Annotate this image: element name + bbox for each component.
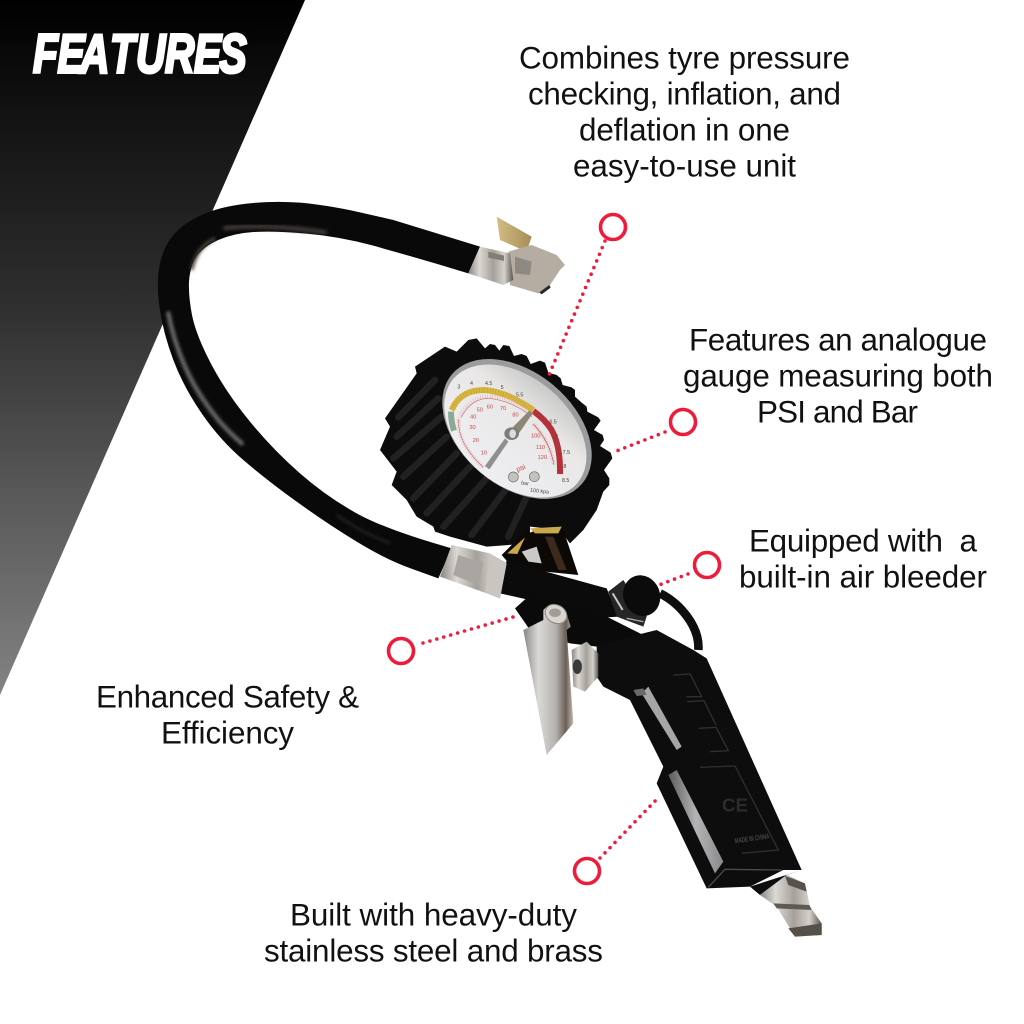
callout text: gauge measuring both [683,359,993,394]
engraved model text: MADE IN CHINA [734,831,770,845]
callout text: deflation in one [579,113,790,148]
tube [500,560,618,617]
gauge unit labels: 100 kpa [530,488,549,496]
callout text: Enhanced Safety & [96,680,359,715]
title: FEATURES [33,23,247,85]
gauge numerals: 3 [457,384,460,390]
trigger pivot housing [515,595,647,647]
callout: analogue gauge [614,323,993,452]
gauge numerals: 8.5 [562,478,569,484]
gauge unit labels: psi [515,462,527,474]
gauge numerals: 6.5 [549,419,557,425]
main tube and handle [440,527,822,937]
callout text: PSI and Bar [757,395,918,430]
gauge needle [485,411,533,469]
marker and leader [388,617,513,664]
gauge numerals: 60 [487,405,493,411]
marker and leader [659,552,720,585]
callout text [264,898,603,969]
callout text [519,41,850,184]
gauge numerals: 110 [536,445,545,451]
chrome pivot nut [572,642,598,692]
gauge numerals: 50 [477,407,483,413]
hose end chuck with brass lever [468,217,565,294]
gauge numerals: 70 [500,406,506,412]
callout text: checking, inflation, and [528,77,841,112]
CE mark: CE [722,795,748,816]
marker and leader [614,410,696,452]
gauge numerals: 120 [538,455,547,461]
bottom edge highlight [708,869,782,887]
rubber gauge boot [380,338,612,547]
gauge stem and brass fitting [502,527,578,575]
gauge assembly [380,331,619,547]
callout text: Efficiency [161,716,294,751]
gauge numerals: 30 [469,425,476,431]
air guard loop [660,593,698,650]
callout text: Built with heavy-duty [290,898,577,933]
callout text: Equipped with a [749,524,978,559]
callout text [683,323,993,430]
gauge numerals [457,381,570,484]
gauge numerals: 100 [531,433,540,439]
grip body [597,630,802,888]
gauge numerals: 4.5 [485,381,492,387]
gauge numerals: 20 [473,438,479,444]
callout text [739,524,987,595]
grip engraving [673,674,778,853]
callout: combined functions [519,41,850,375]
gauge numerals: 10 [481,450,487,456]
bleeder hex nut [608,580,647,627]
gauge numerals: 8 [563,464,566,470]
air bleeder knob [617,570,666,621]
gauge dial [415,331,619,527]
dial face [419,338,612,524]
callout text: Combines tyre pressure [519,41,850,76]
gauge numerals: 7 [555,434,558,440]
gauge numerals: 5 [501,385,504,391]
metal bezel [415,331,619,527]
gauge numerals: 80 [512,413,519,419]
callout text: stainless steel and brass [264,934,603,969]
gauge unit labels: bar [521,480,529,487]
boot ribs [393,380,527,537]
air hose [158,202,480,578]
marker and leader [574,798,658,884]
marker and leader [549,214,626,375]
callout: safety and efficiency [96,617,513,751]
gauge numerals: 40 [470,415,476,421]
quick-connect air coupler [750,870,822,937]
gauge numerals: 5.5 [516,393,523,399]
gauge unit labels [515,462,549,496]
product: tyre inflator gun [158,202,822,937]
callout text [96,680,359,751]
callout: heavy-duty materials [264,798,658,969]
callout text: Features an analogue [689,323,987,358]
callout text: built-in air bleeder [739,560,987,595]
callout: air bleeder [659,524,987,595]
gauge numerals: 7.5 [563,450,570,456]
black gradient corner panel [0,0,305,695]
gauge screws [508,472,539,482]
callout text: easy-to-use unit [573,149,796,184]
glossy grip strips [668,770,723,873]
hose ferrule [440,545,507,598]
steel trigger lever [523,601,573,755]
gauge numerals: 4 [470,381,473,387]
scale arcs [451,390,560,474]
